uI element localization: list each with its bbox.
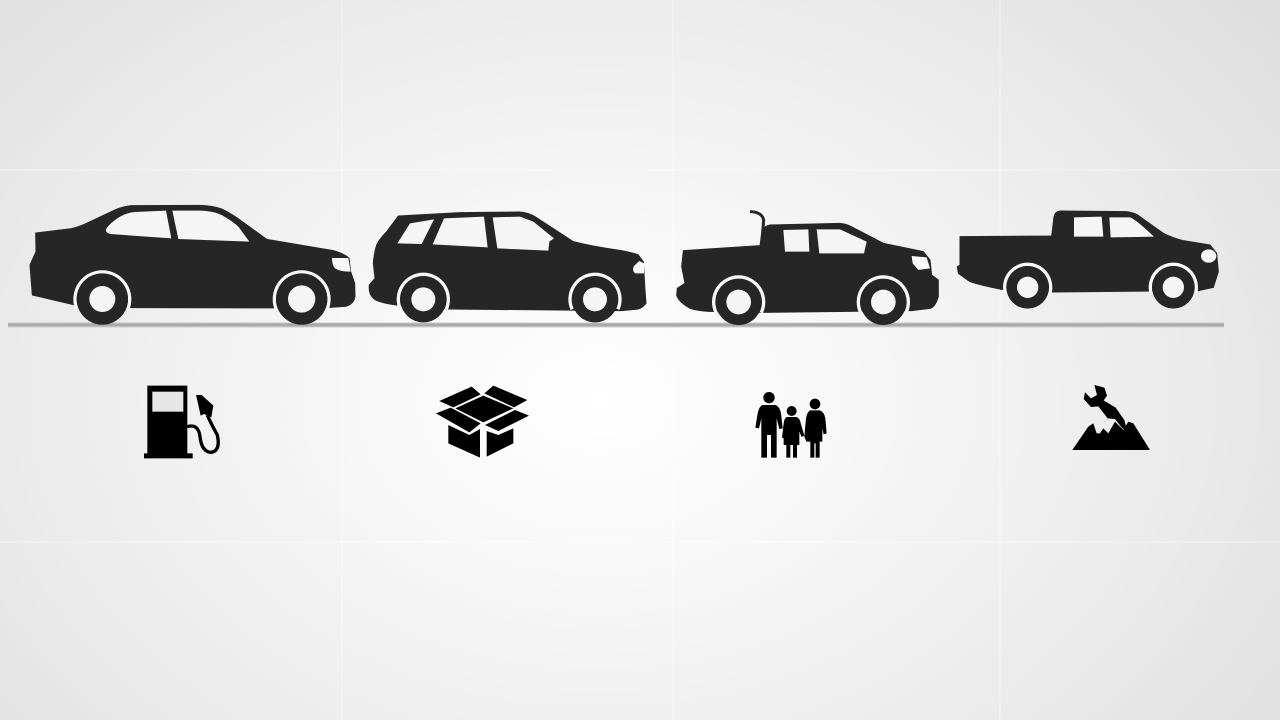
icon: wrench and mountain — [1072, 385, 1150, 450]
vehicle: pickup with snorkel — [677, 212, 938, 325]
vehicle: sedan — [30, 205, 355, 325]
icon: fuel pump — [144, 386, 218, 458]
icon: family — [755, 392, 827, 458]
icon: open box — [436, 386, 529, 458]
ground line — [8, 322, 1224, 328]
vehicle: SUV — [369, 212, 646, 322]
vehicle: pickup — [957, 211, 1218, 309]
